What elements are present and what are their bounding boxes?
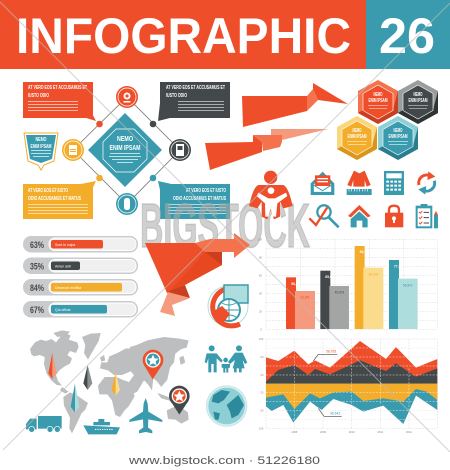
- axis labels: 60: [260, 409, 264, 413]
- callout: red: [23, 82, 96, 121]
- bars: group 3: [355, 246, 383, 329]
- icon: parent and child: [249, 171, 293, 219]
- icon: calculator: [384, 171, 404, 195]
- hexagon: teal: ENIM IPSAM: [388, 134, 408, 140]
- shield badge: ENIM IPSAM: [30, 144, 52, 150]
- area: dark: [266, 360, 437, 384]
- icon: house: [348, 205, 371, 227]
- progress row 35%: 35%: [30, 262, 44, 272]
- bars: group 2: 40,9%: [335, 290, 344, 294]
- bars: group 1: [286, 277, 315, 329]
- center diamond: NEMO: [117, 136, 133, 143]
- axis labels: 20: [260, 373, 264, 377]
- marker: red needle: [48, 353, 57, 379]
- progress row 35%: Amen anti: [55, 264, 71, 268]
- icon: usb node: [116, 193, 138, 215]
- bars: group 1: 58,4%: [291, 282, 301, 286]
- year labels: 2011: [377, 430, 384, 434]
- callout: orange: [23, 181, 96, 219]
- callout: dark: AT VERO EOS ET ACCUSAMUS ET: [166, 85, 225, 91]
- area chart: [259, 337, 437, 434]
- hexagon: dark: ENIM IPSAM: [408, 98, 428, 104]
- shield badge: NEMO: [36, 137, 47, 143]
- axis labels: 100: [259, 337, 264, 341]
- icon: ship: [83, 419, 120, 434]
- chart grid: [266, 239, 437, 329]
- bars: group 4: [389, 260, 418, 329]
- year labels: 2010: [349, 430, 355, 434]
- axis labels: 60: [260, 355, 264, 359]
- callout: teal: ODIO ACCUSAMUS ET MATUS: [173, 196, 226, 202]
- icon: airplane: [129, 398, 162, 433]
- shield badge: [24, 133, 58, 170]
- icon: card node: [62, 139, 84, 161]
- callout: dark: [158, 82, 230, 121]
- icon: webcam node: [116, 86, 138, 108]
- axis labels: [258, 237, 263, 331]
- callout: teal: [158, 181, 230, 219]
- callout: teal: AT VERO EOS ET IUSTO: [186, 188, 226, 194]
- bars: group 3: 93,9%: [360, 250, 369, 254]
- connector dots: [96, 121, 156, 181]
- progress row 67%: 67%: [30, 305, 44, 315]
- callout: red: IUSTO ODIO: [28, 93, 49, 99]
- callout: lower value: 96,642: [330, 412, 340, 416]
- bars: group 4: 77,7%: [394, 265, 403, 269]
- bar chart: [258, 237, 437, 331]
- world map markers and transport: [26, 345, 247, 434]
- hexagon: dark: [398, 80, 438, 124]
- pin: Australia: [169, 386, 190, 415]
- progress row 84%: Deserunt mollitia: [55, 286, 81, 290]
- bars: group 2: [320, 271, 349, 329]
- bars: group 4: 56,8%: [403, 283, 412, 287]
- axis labels: 60: [259, 273, 263, 277]
- area: teal: [266, 384, 437, 424]
- axis labels: 80: [259, 255, 263, 259]
- progress row 63%: Sunt in culpa: [55, 243, 75, 247]
- center diamond: ENIM IPSAM: [110, 145, 141, 152]
- progress row 67%: Qui officia: [55, 308, 71, 312]
- progress row 84%: [23, 279, 138, 296]
- area: yellow: [266, 384, 437, 409]
- year labels: [291, 430, 412, 434]
- hexagon: red: [358, 80, 398, 124]
- hexagon: yellow: NEMO: [352, 128, 362, 134]
- area: red: [266, 341, 437, 384]
- axis labels: 100: [258, 237, 263, 241]
- icon: padlock: [385, 206, 403, 227]
- hexagon: teal: [378, 116, 418, 160]
- progress row 35%: [23, 258, 138, 274]
- callout: orange: AT VERO EOS ET IUSTO: [28, 188, 68, 194]
- icon: globe: [206, 386, 247, 426]
- axis labels: 20: [259, 309, 263, 313]
- bars: group 2: 65,0%: [325, 275, 335, 279]
- origami arrow upper: [242, 83, 348, 127]
- marker: teal needle: [71, 383, 79, 412]
- progress row 63%: [23, 236, 138, 252]
- callout: lower value: [318, 408, 342, 416]
- big origami arrow: [145, 233, 250, 316]
- callout: upper value: [313, 350, 337, 361]
- hexagon: red: ENIM IPSAM: [368, 98, 388, 104]
- marker: dark needle: [83, 365, 92, 390]
- world map continents: [30, 330, 189, 433]
- icon: refresh arrows: [418, 171, 435, 195]
- marker: yellow needle: [112, 372, 120, 396]
- hexagon: yellow: ENIM IPSAM: [348, 134, 366, 140]
- pin: Asia: [143, 350, 163, 379]
- icon: device node: [169, 139, 191, 161]
- source credit: www.bigstock.com · 51226180: [128, 455, 320, 467]
- axis labels: 20: [260, 391, 264, 395]
- axis labels: [259, 337, 264, 430]
- year labels: 2012: [406, 430, 412, 434]
- icon: checklist: [416, 204, 438, 228]
- connector lines: [73, 97, 180, 204]
- progress row 67%: [23, 301, 138, 318]
- overlay grid: [266, 348, 437, 423]
- icon: family: [205, 345, 247, 373]
- number badge: 26: [379, 8, 435, 64]
- hexagon: red: NEMO: [374, 92, 383, 98]
- icon: globe with screen: [208, 285, 248, 326]
- year labels: 2009: [320, 430, 326, 434]
- hexagon: yellow: [337, 116, 377, 160]
- icon: truck: [26, 416, 62, 432]
- icon: magnifier check: [309, 205, 339, 227]
- icon: sweater and ruler: [347, 171, 372, 195]
- icon: envelope: [311, 172, 334, 195]
- hexagon: dark: NEMO: [414, 92, 423, 98]
- center diamond: [88, 113, 162, 187]
- hexagon: teal: NEMO: [394, 128, 403, 134]
- axis labels: 0: [261, 327, 263, 331]
- bars: group 1: 42,8%: [300, 296, 310, 300]
- icon grid: [249, 171, 438, 228]
- callout: upper value: 58,765: [326, 350, 336, 354]
- bars: group 3: 60,1%: [369, 272, 378, 276]
- year labels: 2008: [291, 430, 298, 434]
- area grid: [266, 339, 437, 428]
- callout: orange: ODIO ACCUSAMUS ET MATUS: [28, 196, 81, 202]
- progress bars: [23, 236, 138, 318]
- progress row 63%: 63%: [30, 240, 44, 250]
- callout: dark: IUSTO ODIO: [166, 93, 187, 99]
- title banner: INFOGRAPHIC: [16, 8, 351, 64]
- origami arrow lower: [205, 129, 328, 170]
- callout: red: AT VERO EOS ET ACCUSAMUS ET: [28, 85, 87, 91]
- axis labels: 40: [259, 291, 263, 295]
- progress row 84%: 84%: [30, 283, 44, 293]
- axis labels: 100: [259, 426, 264, 430]
- number badge: [366, 0, 450, 69]
- connector diagram: [23, 82, 230, 219]
